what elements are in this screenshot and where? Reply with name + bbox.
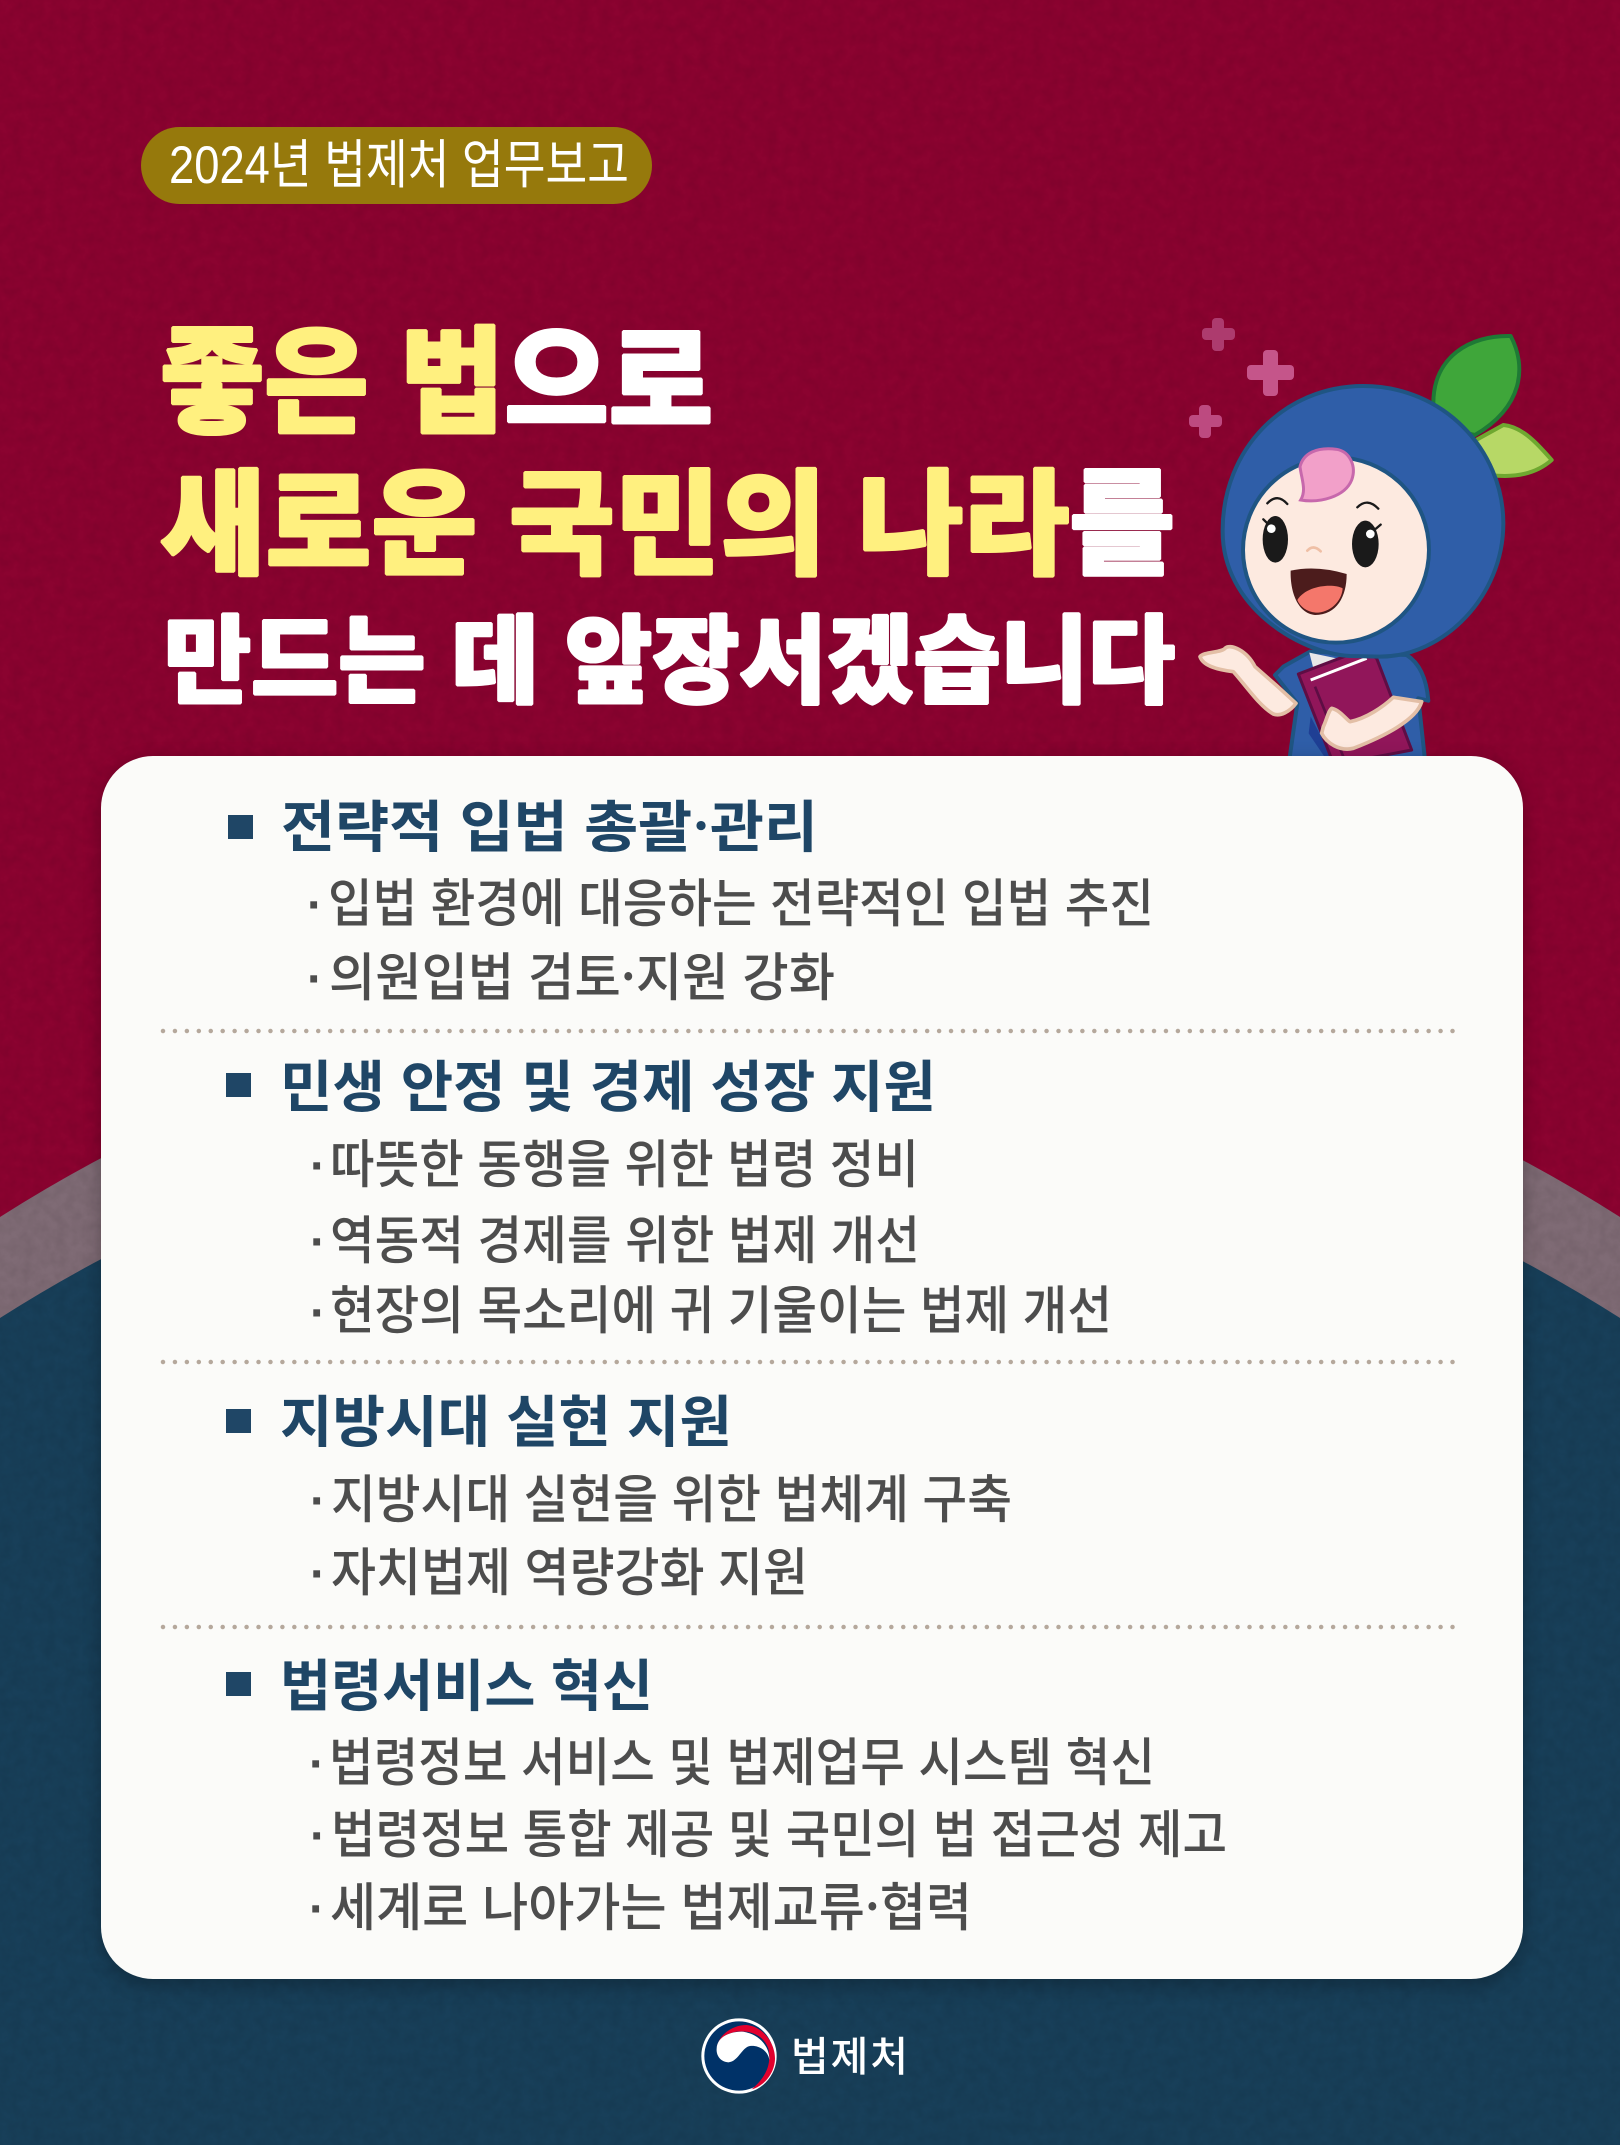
item dot: ·	[310, 1548, 326, 1601]
mascot leaves	[1433, 336, 1552, 476]
item dot: ·	[310, 1216, 326, 1269]
bullet square	[226, 1409, 251, 1433]
mascot hood	[1223, 386, 1503, 657]
title: three-line headline	[160, 318, 1175, 716]
item: 입법 환경에 대응하는 전략적인 입법 추진	[328, 876, 1154, 934]
mascot book	[1296, 657, 1414, 756]
footer logo: taegeuk emblem	[701, 2018, 777, 2094]
heading: 지방시대 실현 지원	[280, 1391, 732, 1454]
item dot: ·	[310, 1140, 326, 1193]
mascot mouth	[1291, 568, 1347, 615]
title line 1: 좋은 법으로	[160, 318, 713, 448]
heading: 민생 안정 및 경제 성장 지원	[280, 1056, 936, 1119]
item: 역동적 경제를 위한 법제 개선	[330, 1213, 920, 1271]
mascot face	[1243, 457, 1429, 643]
panel: white content card	[101, 756, 1523, 1979]
mascot body	[1275, 652, 1428, 760]
mascot collar	[1309, 653, 1337, 668]
item dot: ·	[307, 879, 323, 932]
bullet square	[226, 1073, 251, 1097]
section 2: livelihoods and economy	[226, 1056, 1112, 1341]
item dot: ·	[307, 953, 323, 1006]
title line 2: 새로운 국민의 나라를	[160, 463, 1175, 590]
background: teal arc	[0, 1082, 1620, 2145]
mascot hair petal	[1300, 449, 1353, 501]
mascot left arm	[1200, 647, 1296, 715]
item: 자치법제 역량강화 지원	[331, 1545, 808, 1603]
section 4: legal services	[226, 1655, 1227, 1941]
mascot eyes	[1263, 498, 1381, 567]
section 3: regional era	[226, 1391, 1012, 1603]
item: 의원입법 검토·지원 강화	[329, 936, 835, 1011]
tag pill: report label	[141, 127, 652, 204]
item: 현장의 목소리에 귀 기울이는 법제 개선	[330, 1283, 1112, 1341]
item dot: ·	[310, 1287, 326, 1340]
item dot: ·	[310, 1475, 326, 1528]
item: 법령정보 서비스 및 법제업무 시스템 혁신	[329, 1735, 1155, 1793]
mascot inner coat	[1308, 717, 1329, 756]
item: 따뜻한 동행을 위한 법령 정비	[330, 1137, 919, 1195]
mascot right arm	[1322, 697, 1422, 749]
heading: 전략적 입법 총괄 ·관리	[281, 783, 818, 864]
item dot: ·	[309, 1738, 325, 1791]
tag pill: report label: 2024년 법제처 업무보고	[169, 136, 629, 195]
section 1: legislative management	[228, 783, 1154, 1011]
item: 세계로 나아가는 법제교류·협력	[330, 1866, 972, 1941]
item: 지방시대 실현을 위한 법체계 구축	[331, 1472, 1012, 1530]
item: 법령정보 통합 제공 및 국민의 법 접근성 제고	[331, 1807, 1227, 1865]
icon: three pink plus signs	[1189, 318, 1294, 438]
title line 3: 만드는 데 앞장서겠습니다	[164, 609, 1175, 716]
bullet square	[226, 1672, 251, 1696]
mascot nose	[1307, 547, 1321, 551]
background: gray arc band	[0, 981, 1620, 2145]
item dot: ·	[310, 1810, 326, 1863]
footer: ministry name: 법제처	[791, 2034, 908, 2080]
heading: 법령서비스 혁신	[280, 1655, 653, 1718]
mascot: blue hooded character with book	[1200, 336, 1552, 763]
card shadow	[101, 760, 1523, 1986]
item dot: ·	[309, 1883, 325, 1936]
bullet square	[228, 815, 253, 839]
